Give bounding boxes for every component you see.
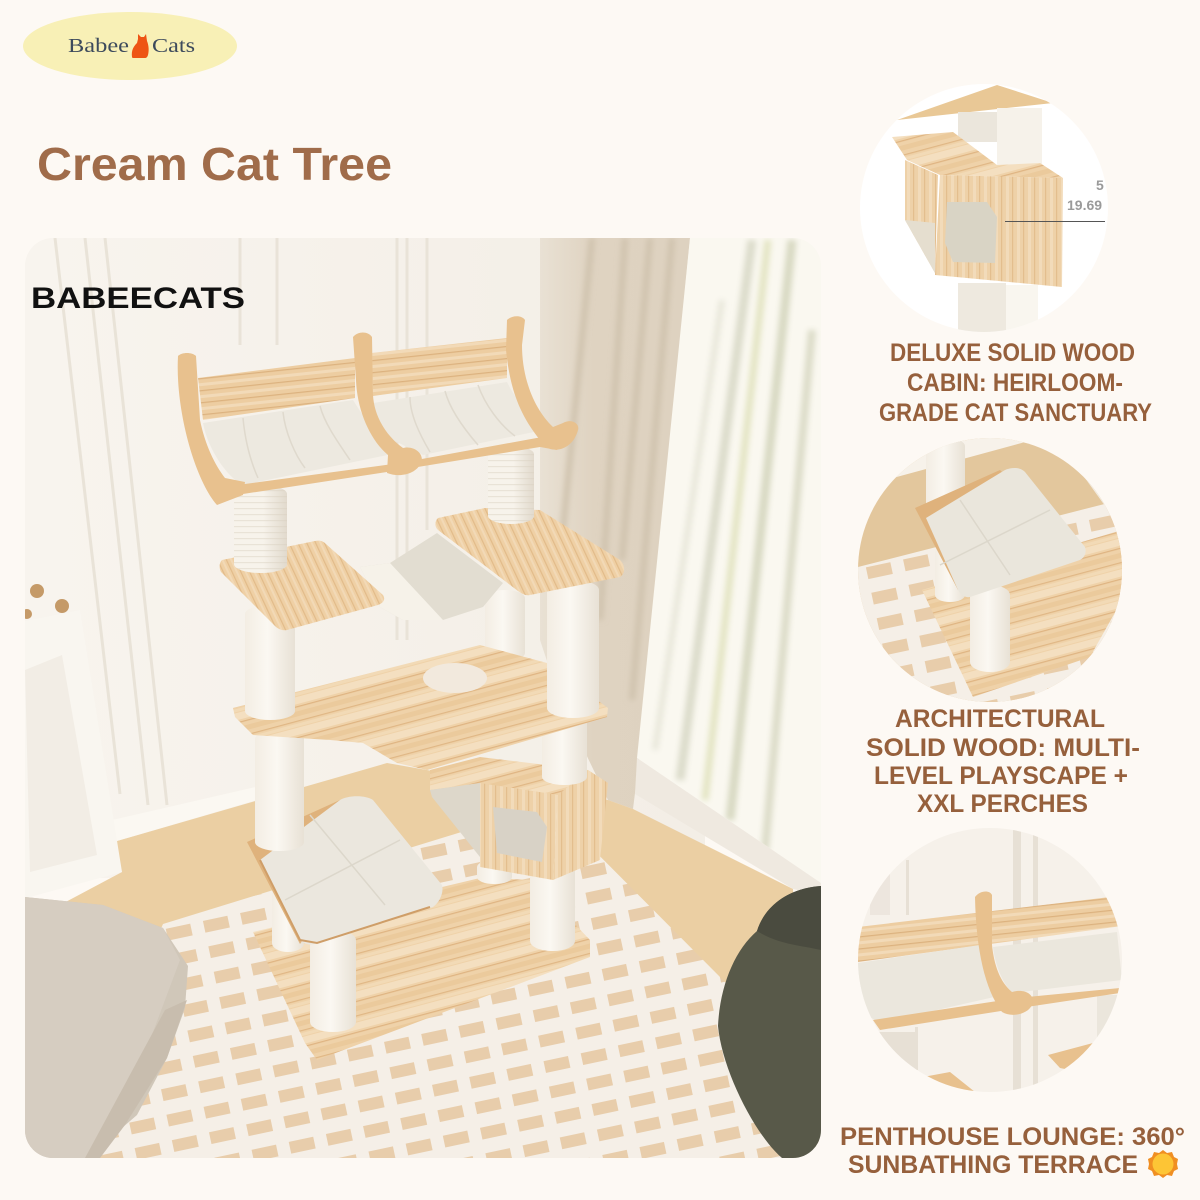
- caption: playscape: [866, 705, 1140, 818]
- sheer curtain streaks: [655, 240, 812, 850]
- title: Cream Cat Tree: [37, 138, 392, 190]
- cabin: [892, 132, 1063, 178]
- lower front posts: [310, 930, 356, 1032]
- lower perch with cushion: [247, 796, 443, 944]
- rug: [858, 500, 1122, 702]
- caption: cabin: DELUXE SOLID WOOD: [890, 339, 1135, 367]
- caption: playscape: SOLID WOOD: MULTI-: [866, 734, 1140, 762]
- lower back posts: [272, 904, 304, 952]
- panel: room photo with cat tree: [22, 238, 900, 1158]
- lower left post: [255, 730, 304, 851]
- logo badge: Babee: [68, 35, 129, 57]
- icon: sun: [1148, 1150, 1178, 1178]
- wall corner: [858, 438, 1040, 490]
- caption: cabin: [879, 339, 1152, 427]
- sheer window: [637, 238, 705, 804]
- dimension label: 19.69: [1067, 197, 1102, 213]
- cabin: [430, 715, 608, 880]
- post under cabin: [958, 283, 1006, 333]
- armchair: [718, 886, 821, 1158]
- cushion perch: [915, 470, 1030, 590]
- back rail: [858, 897, 1122, 962]
- scratching posts upper: [234, 485, 287, 573]
- left shelf: [220, 541, 384, 630]
- baseboard: [117, 834, 138, 841]
- caption: penthouse: PENTHOUSE LOUNGE: 360°: [840, 1123, 1185, 1151]
- caption: penthouse: SUNBATHING TERRACE: [848, 1151, 1138, 1179]
- wooden floor: [60, 763, 800, 1000]
- arc strap: [975, 891, 1033, 1015]
- wall moulding: [55, 238, 427, 805]
- caption: playscape: LEVEL PLAYSCAPE +: [874, 762, 1128, 790]
- arc left: [178, 353, 245, 505]
- arc centre: [353, 332, 422, 475]
- logo badge: [23, 12, 237, 80]
- caption: cabin: CABIN: HEIRLOOM-: [907, 369, 1123, 397]
- cat tree: [178, 316, 624, 1060]
- wall: [197, 238, 705, 845]
- hammock: [390, 533, 503, 620]
- top double lounge: [178, 316, 578, 505]
- front rail: [243, 438, 558, 494]
- arc right: [506, 316, 578, 450]
- wall moulding: [870, 830, 1038, 1092]
- top platform: [897, 85, 1053, 120]
- side pedestal: [25, 584, 122, 872]
- cushion seams: [243, 385, 515, 478]
- caption: playscape: ARCHITECTURAL: [895, 705, 1105, 733]
- panel: penthouse detail circle: [858, 828, 1122, 1092]
- caption: penthouse: [840, 1123, 1185, 1179]
- caption: playscape: XXL PERCHES: [917, 790, 1088, 818]
- back rail: [198, 358, 355, 420]
- sheer hem: [635, 758, 821, 895]
- back post through cabin: [501, 590, 525, 656]
- cushions: [203, 400, 397, 485]
- rug: [100, 813, 819, 1158]
- panel: playscape detail circle: [858, 438, 1122, 702]
- base board: [253, 878, 590, 1060]
- caption: cabin: GRADE CAT SANCTUARY: [879, 399, 1152, 427]
- base board: [922, 530, 1122, 697]
- side post: [1097, 995, 1122, 1045]
- middle platform: [233, 645, 608, 770]
- posts: [935, 545, 965, 602]
- lower shelves: [923, 1072, 975, 1092]
- sofa: [25, 897, 188, 1158]
- panel: cabin detail circle: [860, 84, 1108, 333]
- watermark: BABEECATS: [31, 282, 245, 315]
- logo badge: Cats: [152, 35, 195, 57]
- upper posts: [245, 605, 295, 720]
- curtain folds: [560, 238, 672, 700]
- front rail: [873, 988, 1120, 1030]
- posts: [958, 112, 1000, 142]
- panel: cabin detail circle: 5: [1096, 177, 1104, 193]
- right shelf: [435, 508, 624, 595]
- cushions: [858, 945, 1003, 1023]
- curtain: [540, 238, 690, 809]
